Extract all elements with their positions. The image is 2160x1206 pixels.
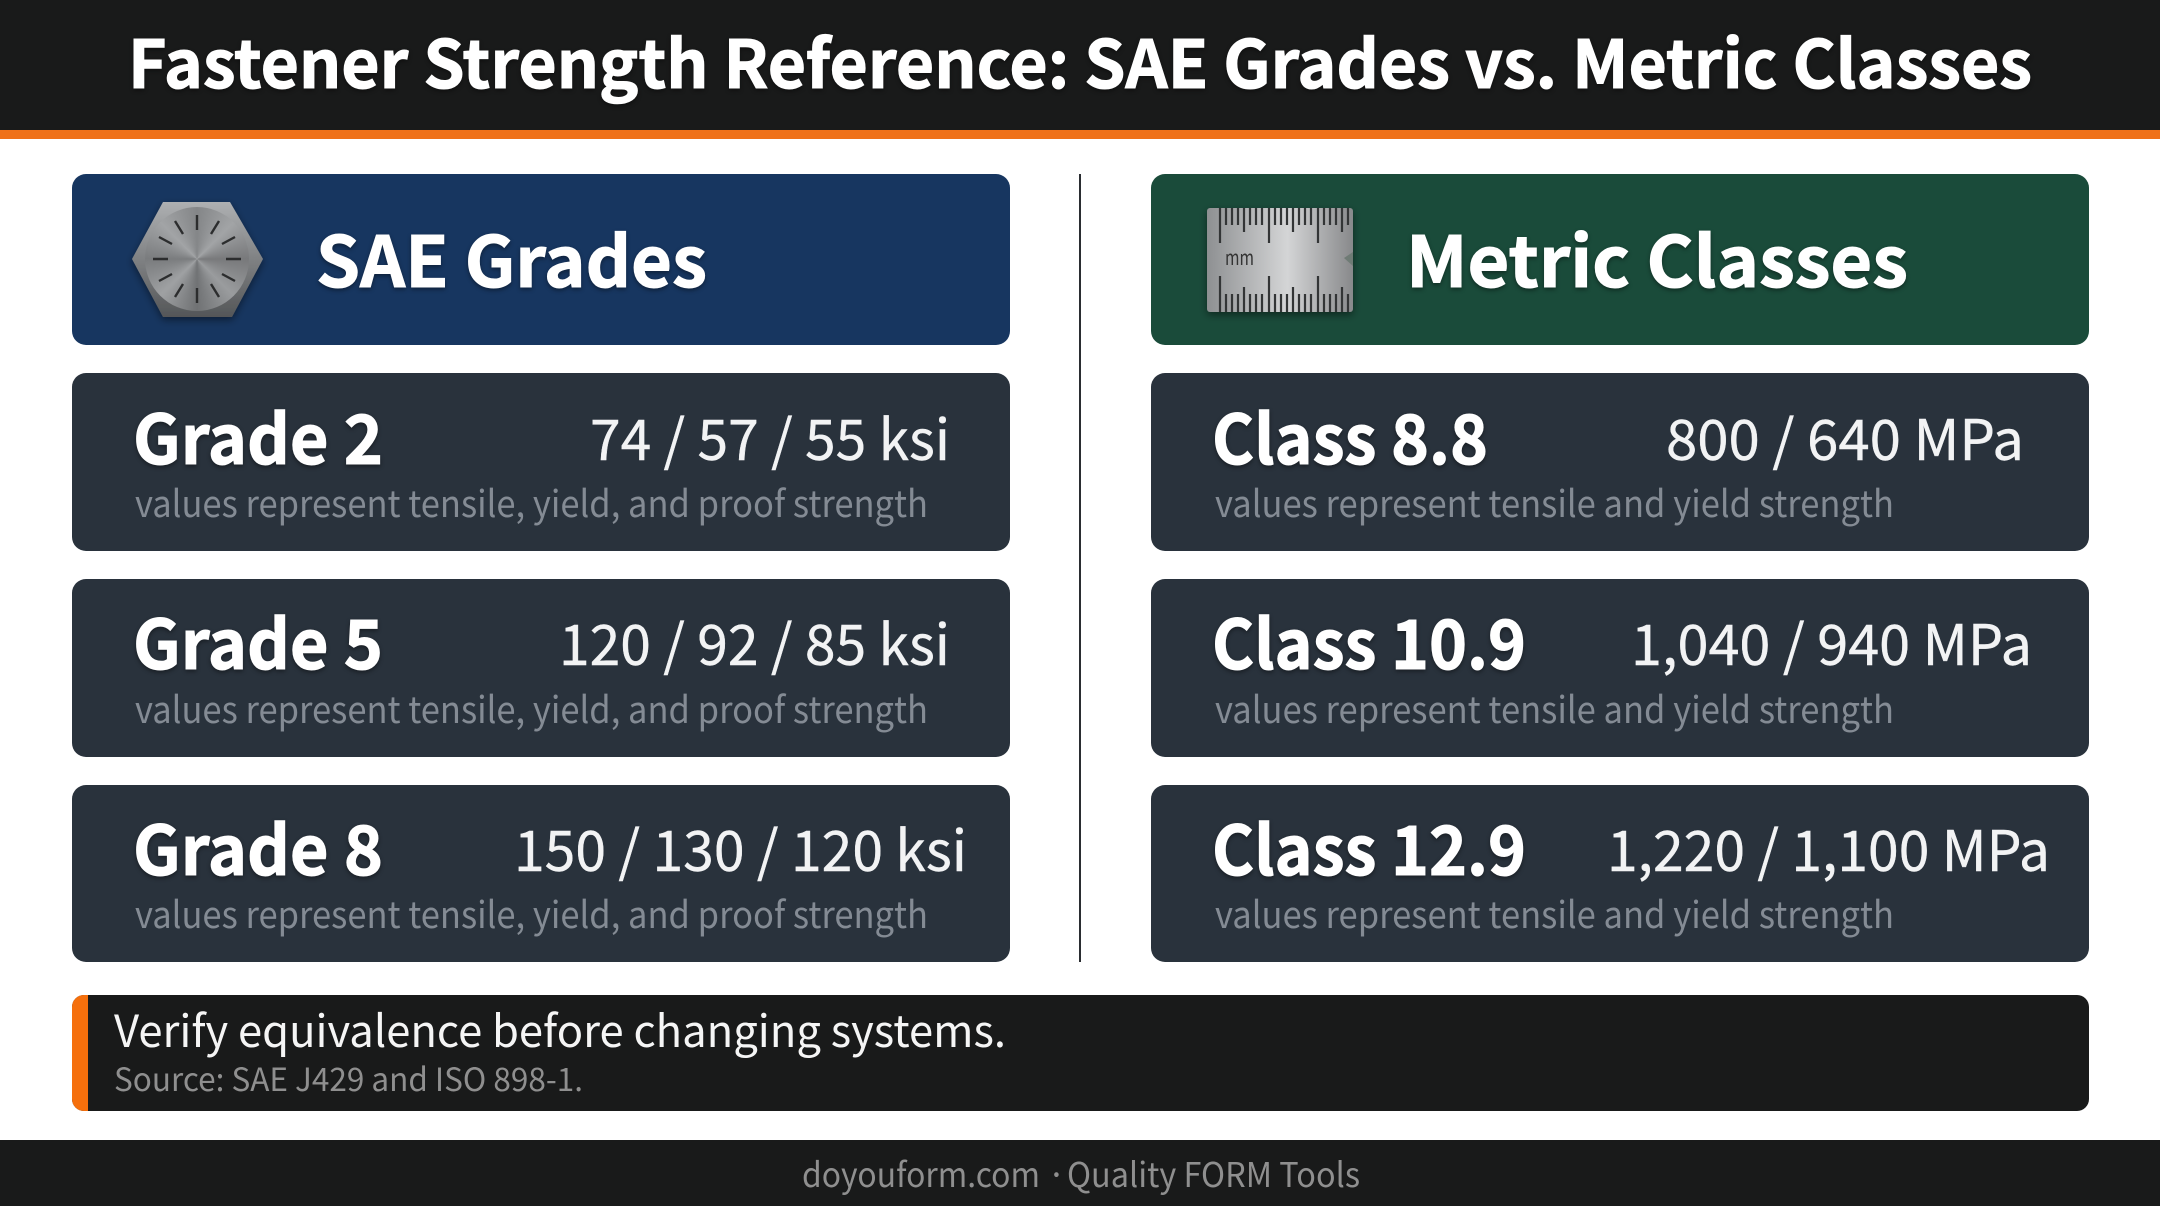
callout bbox=[72, 995, 2089, 1111]
panel: Class 10.9 bbox=[1151, 579, 2089, 757]
panel: Class 12.9: 1,220 / 1,100 MPa bbox=[1607, 807, 2050, 888]
heading: SAE Grades: SAE Grades bbox=[316, 207, 707, 308]
panel: Metric header bbox=[1151, 174, 2089, 345]
panel: Class 10.9: Class 10.9 bbox=[1212, 590, 1526, 689]
panel: Grade 2: Grade 2 bbox=[133, 385, 383, 484]
panel: Class 10.9: 1,040 / 940 MPa bbox=[1631, 601, 2032, 682]
panel: Class 12.9: Class 12.9 bbox=[1212, 796, 1526, 895]
footer bbox=[0, 1140, 2160, 1206]
panel: Grade 5: Grade 5 bbox=[133, 590, 383, 689]
header bar bbox=[0, 0, 2160, 139]
panel: Grade 5: values represent tensile, yield, and proof strength bbox=[135, 680, 928, 734]
icon: bolt head bbox=[132, 202, 263, 317]
heading: Metric Classes: Metric Classes bbox=[1406, 207, 1908, 308]
footer: Quality FORM Tools bbox=[1067, 1148, 1360, 1197]
panel: Class 8.8 bbox=[1151, 373, 2089, 551]
panel: SAE header bbox=[72, 174, 1010, 345]
panel: Grade 2: 74 / 57 / 55 ksi bbox=[590, 396, 950, 477]
title: Fastener Strength Reference: SAE Grades vs. Metric Classes bbox=[128, 12, 2032, 108]
panel: Class 8.8: 800 / 640 MPa bbox=[1666, 396, 2024, 477]
panel: Grade 8: values represent tensile, yield, and proof strength bbox=[135, 885, 928, 939]
panel: Class 12.9 bbox=[1151, 785, 2089, 962]
panel: Grade 8 bbox=[72, 785, 1010, 962]
panel: Grade 2: values represent tensile, yield, and proof strength bbox=[135, 474, 928, 528]
icon: ruler bbox=[1207, 208, 1353, 312]
panel: Grade 2 bbox=[72, 373, 1010, 551]
callout: Verify equivalence before changing systems. bbox=[114, 996, 1006, 1060]
icon: ruler: mm bbox=[1225, 242, 1254, 271]
divider bbox=[1079, 174, 1081, 962]
panel: Grade 5: 120 / 92 / 85 ksi bbox=[559, 601, 950, 682]
footer: doyouform.com bbox=[802, 1148, 1040, 1197]
panel: Class 10.9: values represent tensile and yield strength bbox=[1215, 680, 1894, 734]
panel: Grade 8: Grade 8 bbox=[133, 796, 383, 895]
callout: Source: SAE J429 and ISO 898-1. bbox=[114, 1055, 583, 1101]
panel: Grade 8: 150 / 130 / 120 ksi bbox=[514, 807, 967, 888]
footer: · bbox=[1047, 1148, 1066, 1197]
panel: Class 8.8: Class 8.8 bbox=[1212, 385, 1488, 484]
panel: Grade 5 bbox=[72, 579, 1010, 757]
panel: Class 8.8: values represent tensile and yield strength bbox=[1215, 474, 1894, 528]
panel: Class 12.9: values represent tensile and yield strength bbox=[1215, 885, 1894, 939]
